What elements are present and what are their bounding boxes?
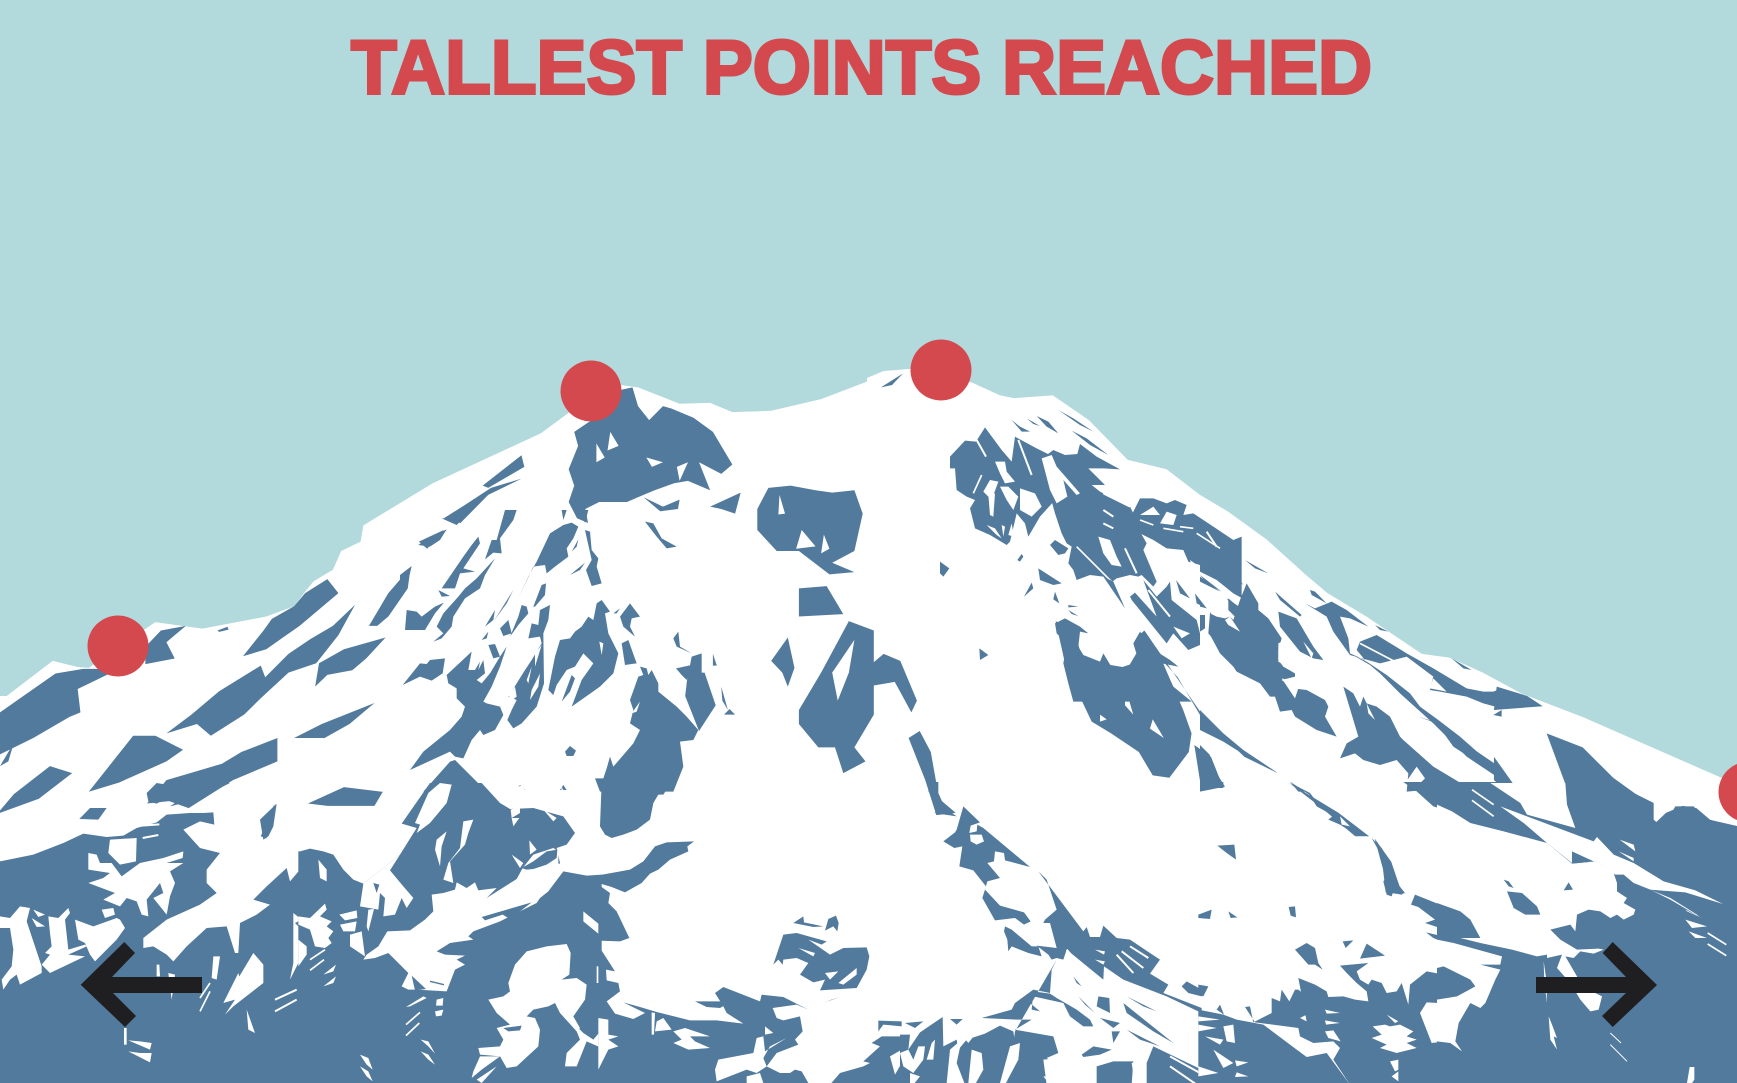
rock shading: upper left slopes [0, 387, 874, 839]
rock shading: lower slope, far right [1437, 783, 1737, 1083]
mountain illustration [0, 369, 1737, 1083]
summit marker: far right [1718, 762, 1737, 822]
summit marker: centre left [560, 360, 622, 422]
rock shading: lower slope, centre right [900, 782, 1202, 1083]
arrow: previous [81, 942, 202, 1027]
rock shading: upper right ridge, lower band [1200, 560, 1502, 792]
rock shading: lower slope, centre [598, 782, 902, 1083]
rock shading: lower slope, right [1198, 782, 1502, 1083]
title: TALLEST POINTS REACHED [351, 26, 1372, 110]
rock shading: lower slope, far left [0, 783, 302, 1083]
rock shading: upper right slopes [867, 373, 1737, 895]
arrow: next [1536, 942, 1657, 1027]
summit marker: centre right [910, 340, 972, 400]
summit marker: far left [88, 616, 148, 676]
snow silhouette: right [867, 369, 1737, 1083]
snow silhouette: left [0, 379, 874, 1083]
rock shading: central upper slopes [400, 510, 702, 792]
rock shading: lower slope, centre left [298, 783, 602, 1083]
rock shading: upper right ridge, streaked band [940, 410, 1242, 702]
